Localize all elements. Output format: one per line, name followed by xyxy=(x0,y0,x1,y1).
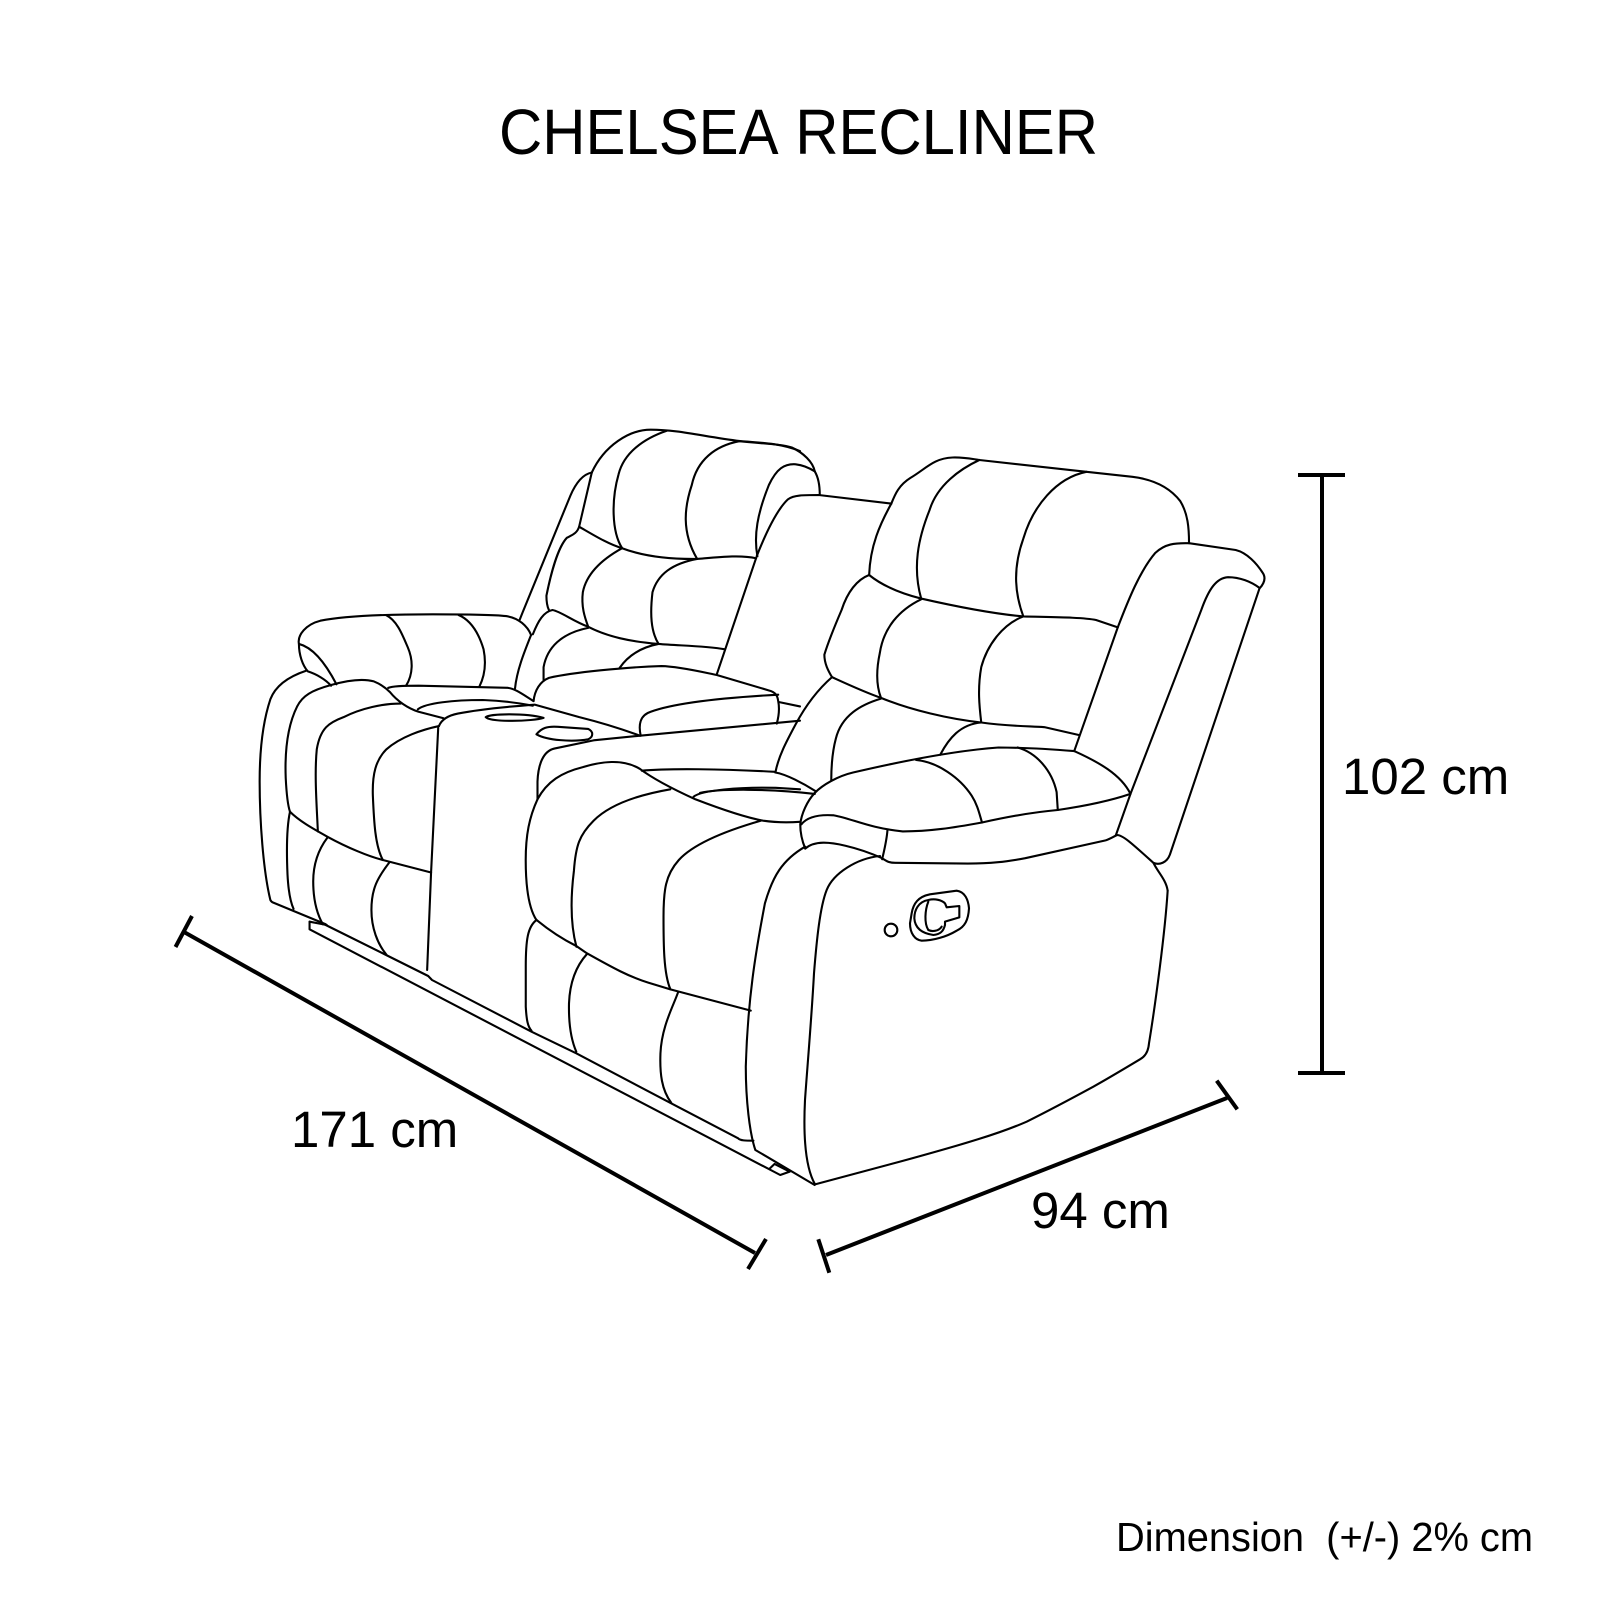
right outer back wing xyxy=(1074,543,1265,864)
right recliner back and arm xyxy=(700,441,1265,890)
width dimension bar xyxy=(176,916,766,1269)
left armrest pad xyxy=(299,614,534,701)
lower seat fronts and base xyxy=(310,821,815,1185)
left recliner and centre console xyxy=(260,430,800,970)
centre console with cup holders xyxy=(418,666,800,970)
icon: side button xyxy=(885,924,897,936)
tolerance note: Dimension (+/-) 2% cm xyxy=(1116,1514,1533,1560)
height label: 102 cm xyxy=(1342,748,1509,805)
icon: recline lever xyxy=(910,891,969,941)
right seat front panels xyxy=(526,821,815,1185)
left recliner back cushions xyxy=(515,430,800,689)
height dimension bar xyxy=(1298,475,1345,1073)
base rail xyxy=(310,922,790,1175)
rear panel between recliners xyxy=(738,441,891,556)
right armrest pad xyxy=(800,747,1168,890)
right seat top cushions xyxy=(526,762,800,947)
left seat cushions xyxy=(260,671,444,955)
recliner side panel xyxy=(804,856,1168,1184)
depth label: 94 cm xyxy=(1031,1182,1170,1239)
depth dimension bar xyxy=(818,1081,1237,1273)
sofa line drawing xyxy=(260,430,1265,1185)
width label: 171 cm xyxy=(291,1101,458,1158)
title: CHELSEA RECLINER xyxy=(499,96,1098,168)
right recliner back cushions xyxy=(700,457,1189,794)
